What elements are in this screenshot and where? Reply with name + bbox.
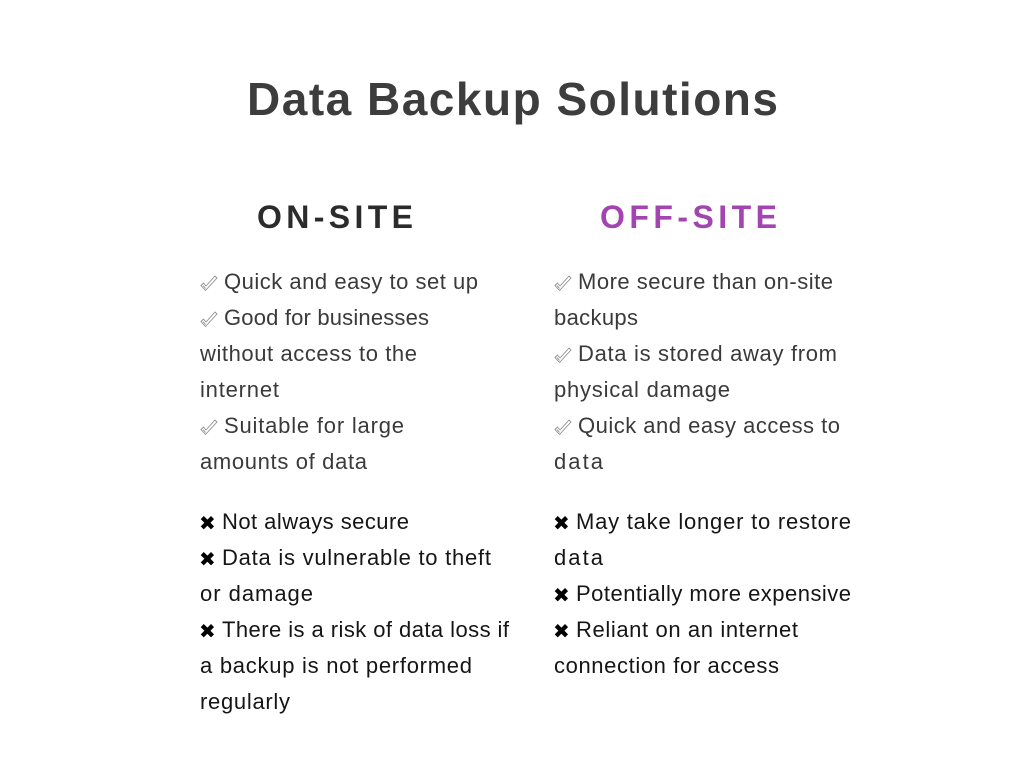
disadvantage text: Data is vulnerable to theft <box>222 545 491 570</box>
advantage text: Quick and easy to set up <box>224 269 478 294</box>
advantage text: data <box>554 449 604 474</box>
advantage text: Data is stored away from <box>578 341 837 366</box>
advantage text <box>554 413 840 474</box>
heading: off-site: OFF-SITE <box>600 199 777 235</box>
icon: check <box>555 420 571 434</box>
icon: cross: ✖ <box>199 619 216 643</box>
title: Data Backup Solutions <box>247 73 778 125</box>
advantage text: Suitable for large <box>224 413 404 438</box>
off-site advantages <box>554 269 840 474</box>
advantage text: amounts of data <box>200 449 368 474</box>
disadvantage text <box>200 545 491 606</box>
icon: cross: ✖ <box>199 547 216 571</box>
advantage text: without access to the <box>199 341 417 366</box>
disadvantage text: Reliant on an internet <box>576 617 798 642</box>
icon: check <box>201 312 217 326</box>
icon: check <box>555 276 571 290</box>
icon: cross: ✖ <box>553 511 570 535</box>
panel: on-site <box>199 199 510 714</box>
disadvantage text: regularly <box>200 689 290 714</box>
icon: cross: ✖ <box>553 619 570 643</box>
disadvantage text <box>200 617 510 714</box>
icon: cross: ✖ <box>199 511 216 535</box>
advantage text: physical damage <box>554 377 730 402</box>
advantage text: internet <box>200 377 279 402</box>
disadvantage text <box>554 509 851 570</box>
on-site disadvantages <box>199 509 510 714</box>
disadvantage text: or damage <box>200 581 313 606</box>
disadvantage text: Potentially more expensive <box>576 581 851 606</box>
disadvantage text: There is a risk of data loss if <box>222 617 510 642</box>
heading: on-site: ON-SITE <box>257 199 413 235</box>
disadvantage text: Not always secure <box>222 509 409 534</box>
disadvantage text: data <box>554 545 604 570</box>
panel: off-site <box>553 199 851 678</box>
advantage text: Good for businesses <box>224 305 429 330</box>
advantage text: backups <box>554 305 638 330</box>
disadvantage text <box>554 617 798 678</box>
icon: check <box>201 420 217 434</box>
disadvantage text: connection for access <box>554 653 779 678</box>
on-site advantages <box>199 269 478 474</box>
advantage text <box>554 341 837 402</box>
disadvantage text: a backup is not performed <box>200 653 472 678</box>
advantage text <box>199 305 429 402</box>
icon: check <box>555 348 571 362</box>
icon: cross: ✖ <box>553 583 570 607</box>
advantage text <box>554 269 833 330</box>
icon: check <box>201 276 217 290</box>
off-site disadvantages <box>553 509 851 678</box>
advantage text <box>200 413 404 474</box>
disadvantage text: May take longer to restore <box>576 509 851 534</box>
advantage text: More secure than on-site <box>578 269 833 294</box>
advantage text: Quick and easy access to <box>578 413 840 438</box>
